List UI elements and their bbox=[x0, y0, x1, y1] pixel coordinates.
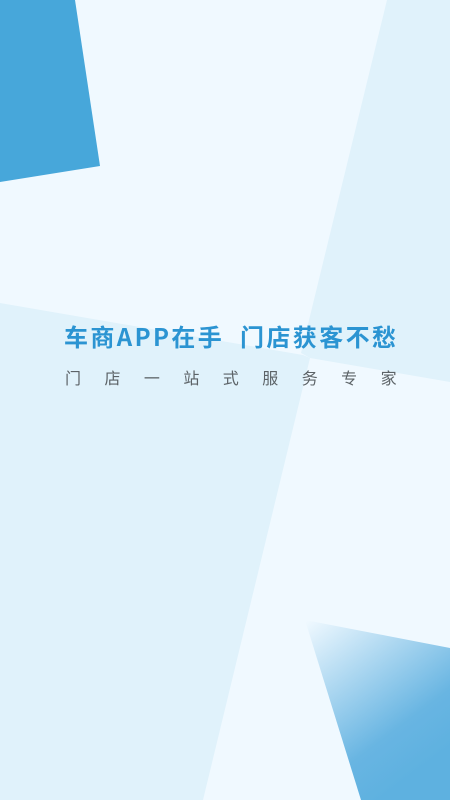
title bbox=[64, 318, 398, 353]
title: 车商APP在手 bbox=[64, 318, 224, 353]
title: 门店获客不愁 bbox=[240, 318, 398, 353]
subtitle: 门店一站式服务专家 bbox=[65, 365, 420, 389]
